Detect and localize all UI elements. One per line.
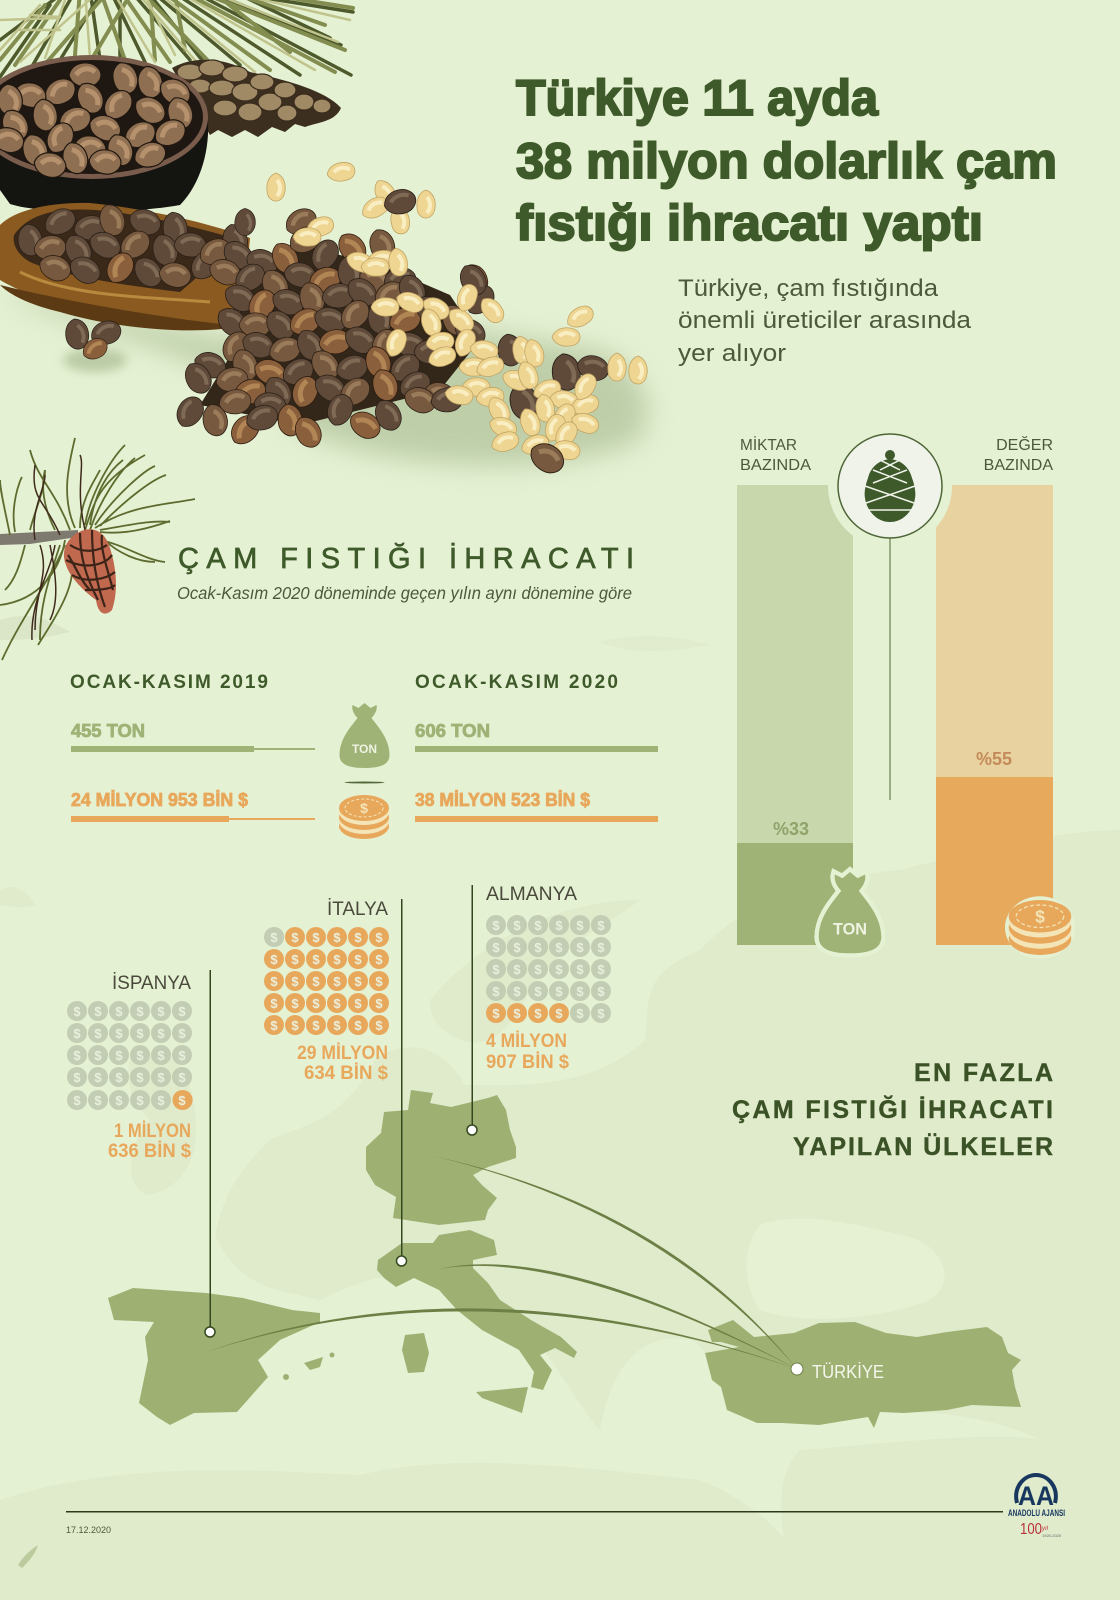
bar: value xyxy=(936,485,1053,945)
callout: İtalya: $$$$$$ xyxy=(270,930,383,945)
callout: İtalya: $$$$$$ xyxy=(270,996,383,1011)
subtitle: yer alıyor xyxy=(678,340,786,367)
callout: Almanya: $$$$$$ xyxy=(492,918,605,933)
bar: quantity: %33 xyxy=(773,819,809,839)
logo: Anadolu Ajansı: yıl xyxy=(1041,1526,1049,1532)
comparison panel: 2019 xyxy=(70,672,315,822)
heading: top export countries xyxy=(732,1059,1053,1161)
photo: pine needles, cone, bowl, scoop and spilled nuts xyxy=(0,0,648,478)
callout: Almanya: ALMANYA xyxy=(486,884,577,905)
callout: İspanya: İSPANYA xyxy=(112,973,191,994)
notch xyxy=(828,424,952,548)
map: Italy xyxy=(377,1230,577,1413)
arcs: export routes xyxy=(206,1156,797,1369)
callout: İtalya: 29 MİLYON xyxy=(297,1043,388,1064)
icon: coins small: $ xyxy=(360,800,368,816)
pine needles xyxy=(0,0,353,77)
pine branch illustration xyxy=(0,438,195,660)
2020 tons: 606 TON xyxy=(415,721,490,741)
section heading: ÇAM FISTIĞI İHRACATI xyxy=(178,542,634,575)
title: 38 milyon dolarlık çam xyxy=(516,133,1057,189)
comparison panel: 2019: OCAK-KASIM 2019 xyxy=(70,672,268,693)
bowl xyxy=(0,55,208,212)
label: miktar: MİKTAR xyxy=(740,435,797,454)
callout: İspanya: $$$$$$ xyxy=(73,1004,186,1019)
callout: Almanya: $$$$$$ xyxy=(492,1006,605,1021)
callout: Almanya xyxy=(467,884,605,1135)
callout: Almanya: 4 MİLYON xyxy=(486,1031,567,1052)
bar: value: %55 xyxy=(976,749,1012,769)
icon: coins large xyxy=(1005,896,1075,959)
2019 tons xyxy=(71,721,315,752)
2019 tons: 455 TON xyxy=(71,721,145,741)
2020 tons xyxy=(415,721,658,752)
title: Türkiye 11 ayda xyxy=(516,70,879,126)
chart: share bars xyxy=(737,424,1075,959)
logo: Anadolu Ajansı: 100 xyxy=(1020,1521,1042,1538)
2020 value xyxy=(415,790,658,822)
subtitle xyxy=(678,275,972,367)
callout: İtalya: $$$$$$ xyxy=(270,974,383,989)
wooden scoop xyxy=(0,201,251,364)
callout: İtalya: $$$$$$ xyxy=(270,1018,383,1033)
2019 value xyxy=(71,790,315,822)
label: deger: DEĞER xyxy=(996,435,1053,454)
2020 value: 38 MİLYON 523 BİN $ xyxy=(415,790,590,810)
subtitle: Türkiye, çam fıstığında xyxy=(678,275,939,302)
bar: quantity xyxy=(737,485,853,945)
scoop and pile shadow xyxy=(0,290,648,465)
stem line xyxy=(890,538,891,800)
icon: sack large: TON xyxy=(833,920,867,938)
callout: İspanya: $$$$$$ xyxy=(73,1026,186,1041)
map: Germany xyxy=(366,1090,516,1225)
callout: İspanya xyxy=(73,970,215,1337)
callout: Almanya: $$$$$$ xyxy=(492,940,605,955)
logo: Anadolu Ajansı xyxy=(1008,1475,1065,1538)
comparison panel: 2020 xyxy=(415,672,658,822)
nut pile xyxy=(171,160,647,478)
callout: İspanya: 1 MİLYON xyxy=(114,1121,191,1142)
label: deger: BAZINDA xyxy=(984,457,1053,474)
icon: sack large xyxy=(819,872,881,953)
icon: sack small: TON xyxy=(352,742,377,756)
map: highlighted countries xyxy=(108,1090,1021,1428)
section subheading: Ocak-Kasım 2020 döneminde geçen yılın aynı dönemine göre xyxy=(177,583,632,603)
section heading xyxy=(177,542,634,603)
callout: Almanya: $$$$$$ xyxy=(492,984,605,999)
icon: pine cone badge xyxy=(838,434,942,538)
heading: top export countries: ÇAM FISTIĞI İHRACATI xyxy=(732,1095,1053,1124)
icon: coins large: $ xyxy=(1035,907,1045,927)
heading: top export countries: YAPILAN ÜLKELER xyxy=(793,1132,1053,1161)
callout: İtalya: $$$$$$ xyxy=(270,952,383,967)
title xyxy=(516,70,1057,251)
pine cone xyxy=(172,60,341,137)
callout: İspanya: $$$$$$ xyxy=(73,1070,186,1085)
icon: sack small xyxy=(340,703,390,768)
comparison panel: 2020: OCAK-KASIM 2020 xyxy=(415,672,618,693)
marker: Türkiye: TÜRKİYE xyxy=(812,1362,884,1382)
date: 17.12.2020 xyxy=(66,1525,111,1535)
label: deger xyxy=(984,435,1053,474)
title: fıstığı ihracatı yaptı xyxy=(516,195,983,251)
footer line xyxy=(66,1511,1003,1512)
callout: İtalya: İTALYA xyxy=(327,899,388,920)
callout: İtalya: 634 BİN $ xyxy=(304,1063,388,1084)
label: miktar: BAZINDA xyxy=(740,457,811,474)
subtitle: önemli üreticiler arasında xyxy=(678,307,972,334)
label: miktar xyxy=(740,435,811,474)
map: Spain xyxy=(108,1288,334,1425)
logo: Anadolu Ajansı: AA xyxy=(1018,1481,1054,1511)
callout: İspanya: $$$$$$ xyxy=(73,1093,186,1108)
callout: Almanya: $$$$$$ xyxy=(492,962,605,977)
callout: İspanya: 636 BİN $ xyxy=(108,1141,191,1162)
logo: Anadolu Ajansı: ANADOLU AJANSI xyxy=(1008,1508,1065,1519)
divider shadow xyxy=(344,782,384,784)
2019 value: 24 MİLYON 953 BİN $ xyxy=(71,790,248,810)
map: Türkiye xyxy=(705,1320,1021,1428)
heading: top export countries: EN FAZLA xyxy=(914,1059,1053,1087)
callout: İtalya xyxy=(270,899,406,1266)
icon: coins small xyxy=(339,795,389,839)
callout: Almanya: 907 BİN $ xyxy=(486,1052,569,1073)
logo: Anadolu Ajansı: 1920-2020 xyxy=(1042,1533,1062,1538)
callout: İspanya: $$$$$$ xyxy=(73,1048,186,1063)
